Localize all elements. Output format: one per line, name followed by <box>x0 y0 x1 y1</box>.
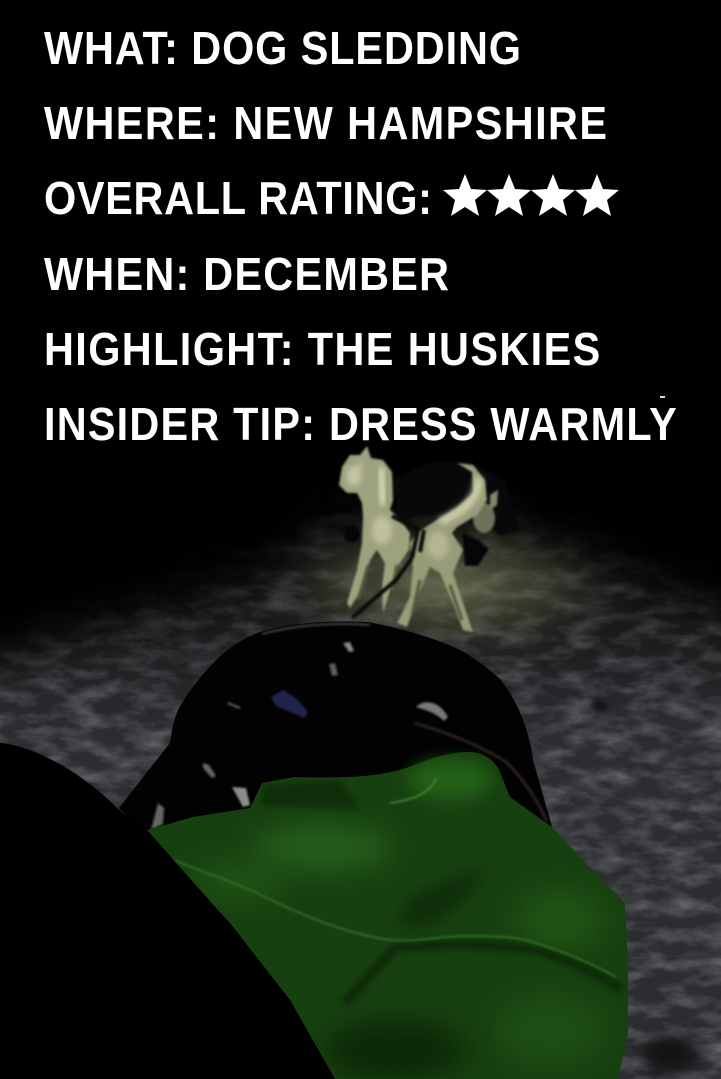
line: when: WHEN: DECEMBER <box>44 249 449 301</box>
sled top rim highlight <box>262 624 370 634</box>
upper fold, bright right part <box>408 760 492 800</box>
line: what: WHAT: DOG SLEDDING <box>44 23 521 75</box>
sled basket <box>119 621 570 930</box>
dog: right husky <box>397 463 487 632</box>
leg shading <box>358 565 462 620</box>
icon: dark boot right <box>462 533 489 566</box>
sled dogs <box>339 446 520 632</box>
dog: right husky head <box>473 490 498 533</box>
line: insider tip: INSIDER TIP: DRESS WARMLY <box>44 399 677 451</box>
under-crease shadow <box>345 945 622 1002</box>
dark foreground silhouette <box>0 743 335 1079</box>
upper fold, dark left part <box>262 780 360 810</box>
upper fold highlight <box>390 778 436 803</box>
head highlight <box>347 462 362 485</box>
line: where: WHERE: NEW HAMPSHIRE <box>44 98 607 150</box>
gear highlights <box>151 642 547 830</box>
shadow patches <box>395 865 490 925</box>
tail highlight <box>440 478 478 522</box>
neck highlight <box>380 468 384 505</box>
line: overall rating: OVERALL RATING: <box>44 173 432 225</box>
dark background dogs <box>392 462 520 535</box>
line: highlight: HIGHLIGHT: THE HUSKIES <box>44 324 600 376</box>
dog: left husky <box>339 446 410 613</box>
bright patches <box>252 826 392 870</box>
icon: four stars <box>443 174 619 216</box>
fold crease line <box>175 860 616 977</box>
headlamp glow on trail <box>285 522 606 647</box>
heading text block <box>44 23 677 451</box>
icon: dark boot left <box>344 526 360 542</box>
green sleeping bag <box>147 752 628 1079</box>
snowy trail <box>0 480 721 1079</box>
chest highlights <box>372 516 392 544</box>
harness lines <box>352 516 424 618</box>
